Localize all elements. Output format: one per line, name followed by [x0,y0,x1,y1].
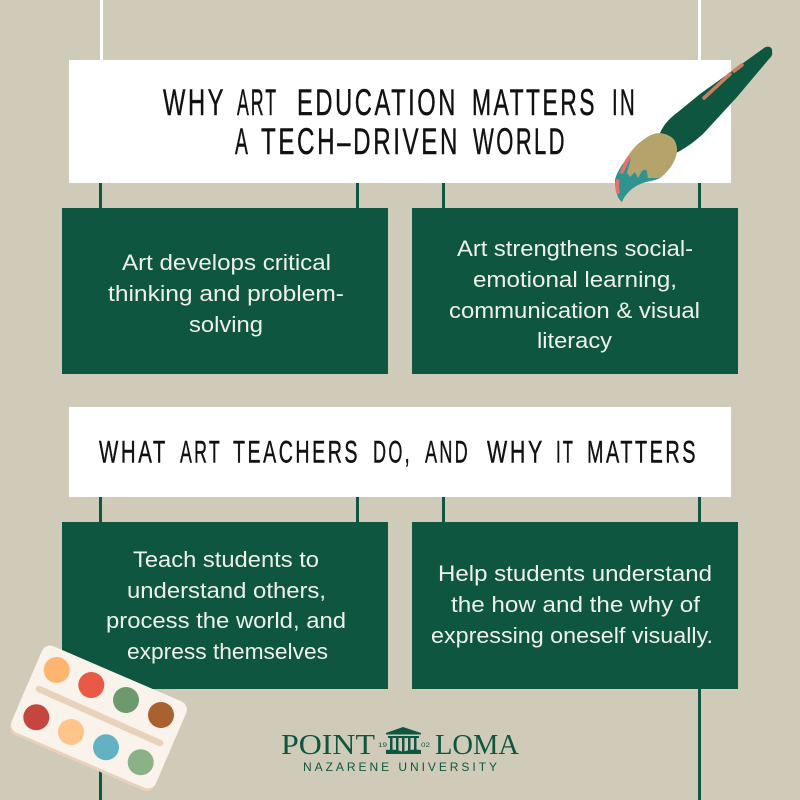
title: A [235,121,250,162]
icon: paintbrush [615,47,772,202]
section heading panel [69,407,731,497]
panel: understand others: understand others, [127,578,326,603]
title: ART [237,82,278,123]
panel: social-emotional learning: literacy [537,328,613,353]
title: IN [612,82,637,123]
panel: social-emotional learning: communication & visual [449,298,700,323]
panel: understand others: process the world, and [106,608,346,633]
title: TECH–DRIVEN [261,121,460,162]
section heading [99,434,698,470]
panel: expressing visually: the how and the why of [451,592,701,617]
section heading: AND [425,434,470,470]
panel: critical thinking: thinking and problem- [108,281,344,306]
section heading: WHY [487,434,545,470]
section heading: IT [556,434,575,470]
logo: Point Loma Nazarene University: 02 [421,742,430,749]
panel: social-emotional learning [412,208,738,374]
section heading: DO, [373,434,412,470]
title: EDUCATION [297,82,458,123]
panel: expressing visually: expressing oneself visually. [431,623,713,648]
panel: social-emotional learning: emotional learning, [473,267,677,292]
panel: social-emotional learning: Art strengthens social- [457,236,693,261]
panel: expressing visually [412,522,738,689]
section heading: MATTERS [587,434,698,470]
title [163,82,637,162]
logo: Point Loma Nazarene University: LOMA [435,730,520,761]
title: WHY [163,82,226,123]
section heading: WHAT [99,434,168,470]
logo: Point Loma Nazarene University [281,727,520,774]
title panel [69,60,731,183]
icon: watercolor palette [7,643,190,794]
panel: understand others [62,522,388,689]
title: WORLD [473,121,567,162]
section heading: ART [180,434,222,470]
icon: logo building [386,727,421,754]
panel: critical thinking: Art develops critical [122,250,331,275]
panel: critical thinking: solving [189,312,263,337]
title: MATTERS [472,82,597,123]
panel: expressing visually: Help students understand [438,561,712,586]
panel: critical thinking [62,208,388,374]
panel: understand others: Teach students to [133,547,319,572]
logo: Point Loma Nazarene University: POINT [281,730,375,761]
logo: Point Loma Nazarene University: NAZARENE UNIVERSITY [303,760,497,774]
panel: understand others: express themselves [127,639,328,664]
logo: Point Loma Nazarene University: 19 [378,742,387,749]
section heading: TEACHERS [233,434,360,470]
